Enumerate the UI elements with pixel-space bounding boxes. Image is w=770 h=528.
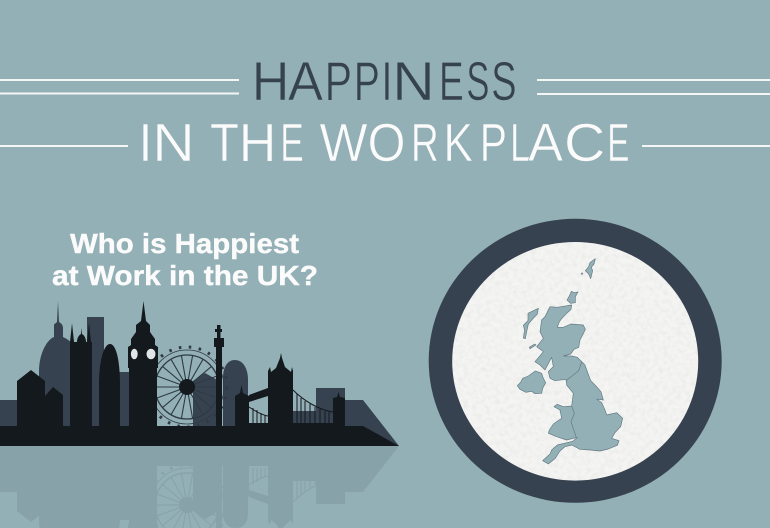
title line: happiness: H bbox=[252, 50, 289, 112]
title line: in the workplace: C bbox=[564, 113, 605, 173]
london skyline bbox=[0, 301, 399, 446]
shetland bbox=[585, 259, 595, 279]
title line: happiness: S bbox=[491, 50, 517, 112]
title line: happiness: P bbox=[354, 50, 380, 112]
title line: happiness: S bbox=[466, 50, 489, 112]
column bbox=[214, 325, 224, 428]
title bbox=[138, 50, 630, 173]
title line: in the workplace: E bbox=[607, 113, 630, 173]
suspension cables bbox=[249, 390, 333, 424]
tower bridge bbox=[235, 353, 345, 428]
title line: in the workplace: A bbox=[528, 113, 563, 173]
great britain bbox=[535, 305, 623, 464]
title line: happiness: N bbox=[392, 50, 435, 112]
title line: in the workplace: N bbox=[152, 113, 195, 173]
houses bbox=[17, 370, 63, 428]
title line: happiness: I bbox=[381, 50, 392, 112]
northern ireland bbox=[517, 371, 546, 394]
gherkin bbox=[99, 344, 120, 428]
platform bbox=[0, 426, 399, 446]
big ben bbox=[128, 301, 158, 428]
orkney bbox=[567, 291, 578, 303]
paper disc bbox=[452, 242, 698, 481]
subheading: Who is Happiest bbox=[70, 228, 299, 259]
title line: in the workplace: T bbox=[210, 113, 239, 173]
uk map medallion bbox=[429, 219, 722, 503]
title line: in the workplace: H bbox=[239, 113, 276, 173]
map of the uk bbox=[517, 259, 623, 464]
london eye bbox=[147, 347, 227, 427]
title line: in the workplace: E bbox=[280, 113, 304, 173]
subheading: at Work in the UK? bbox=[52, 260, 318, 291]
parliament tower bbox=[70, 323, 92, 428]
circle ring bbox=[429, 219, 722, 503]
title line: in the workplace: I bbox=[138, 113, 152, 173]
title line: happiness: P bbox=[325, 50, 352, 112]
reflection of skyline bbox=[0, 446, 399, 528]
foreground landmarks bbox=[0, 301, 399, 446]
country borders bbox=[566, 362, 582, 437]
subheading bbox=[52, 228, 318, 291]
title line: in the workplace: L bbox=[510, 113, 530, 173]
clock faces bbox=[131, 349, 138, 359]
title line: happiness: A bbox=[288, 50, 323, 112]
title line: happiness: E bbox=[439, 50, 464, 112]
title line: in the workplace: R bbox=[411, 113, 439, 173]
title line: in the workplace: P bbox=[480, 113, 507, 173]
title line: in the workplace: O bbox=[368, 113, 405, 173]
title line: in the workplace: W bbox=[320, 113, 368, 173]
hebrides bbox=[523, 308, 538, 339]
background buildings bbox=[0, 301, 399, 446]
title line: in the workplace: K bbox=[444, 113, 473, 173]
